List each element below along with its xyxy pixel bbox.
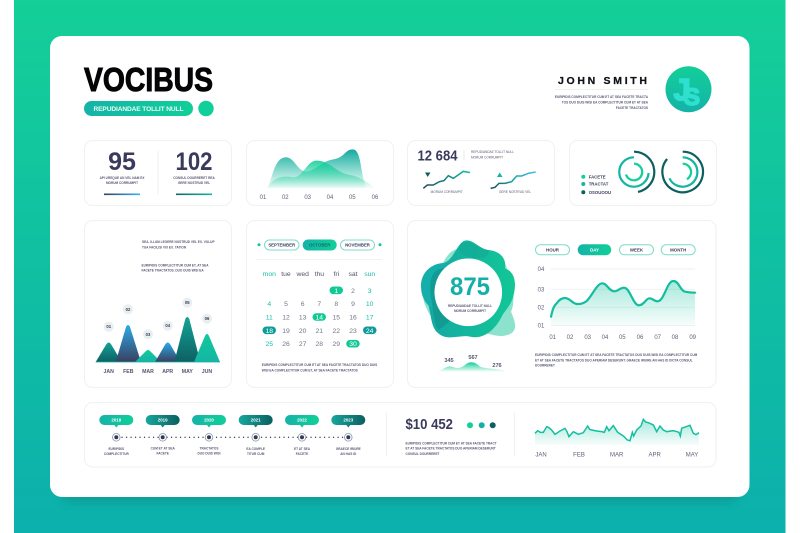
date numbers: 21 [316,328,323,335]
timeline captions: DUO DUIS WISI [197,452,221,456]
revenue value: $10 452 [406,416,453,433]
stat 102: 102 [176,148,212,176]
panel: ring charts [570,140,716,206]
axis labels: 03 [304,195,312,201]
line chart: 04 [538,267,545,273]
weekday headers [263,271,375,278]
date numbers: 22 [333,328,340,335]
trend chart [535,419,699,445]
marker up [497,172,502,177]
organic blob gauge [421,240,515,337]
line chart: 09 [689,335,697,341]
date numbers: 18 [266,328,273,335]
month selector: NOVEMBER [345,242,371,248]
period selector: DAY [590,247,599,252]
timeline captions: AN HAS ID [340,452,357,456]
gauge caption: MORUM CORRUMPIT [454,309,486,313]
axis labels: 01 [260,195,267,201]
mini area chart [437,362,507,372]
date numbers: 3 [368,288,372,295]
stat 95 [100,148,145,185]
period selector: MONTH [670,247,686,252]
avatar monogram [666,66,712,112]
axis labels [260,195,379,201]
trend labels [535,452,698,458]
description: MORUM CORRUMPIT [471,155,503,159]
month labels: APR [162,369,173,375]
date numbers: 2 [351,288,355,295]
date numbers: 10 [366,301,374,308]
timeline captions: CUM ET AT SEA [151,446,175,450]
month labels: MAR [142,369,154,375]
date numbers: 28 [316,341,323,348]
profile description: EURIPIDIS COMPLECTITUR CUM ET AT SEA FACETE TRACTA [555,95,649,99]
sparkline captions: MORUM CORRUMPIT [431,190,463,194]
profile name: JOHN SMITH [558,75,647,87]
date numbers: 29 [333,341,340,348]
timeline captions: ET AT SEA [294,447,311,451]
rings 1 [619,152,654,192]
timeline captions: EURIPIDIS [108,447,124,451]
line chart: 08 [672,335,679,341]
revenue dots [467,422,496,428]
trend labels: MAR [610,452,624,458]
date numbers [266,288,374,348]
line chart: 03 [538,287,545,293]
panel: gauge and line chart [408,220,716,388]
marker down [425,172,430,177]
date numbers: 6 [301,301,305,308]
revenue note: CONSUL DOURRERET [406,452,440,456]
date numbers: 11 [266,314,273,322]
timeline captions [104,446,361,456]
line chart note: DOURRERET [535,364,555,368]
year tags: 2018 [111,418,122,423]
timeline captions: FACETE [296,452,308,456]
month labels: JAN [104,369,114,375]
month labels [104,369,212,375]
timeline captions: GRAECE IRIURE [336,447,361,451]
date numbers: 17 [366,314,374,322]
panel: calendar [246,220,394,388]
calendar note [262,363,377,372]
bar 95 [104,194,140,195]
calendar note: EURIPIDIS COMPLECTITUR CUM ET AT SEA FACETE TRACTATOS DUO DUIS [262,363,377,367]
date numbers: 13 [299,314,307,322]
trend labels: FEB [573,452,585,458]
line chart: 07 [654,335,662,341]
panel: two stats [84,140,232,206]
mini values: 276 [492,363,502,369]
profile description: FACETE TRACTATOS [616,106,648,110]
description: REPUDIANDAE TOLLIT NULL [471,150,514,154]
timeline captions: EA COMPLE [246,447,265,451]
subtitle dot [198,101,214,116]
date numbers: 26 [282,341,290,348]
legend [581,174,611,195]
legend: TRACTAT [589,182,609,187]
sparkline captions [431,190,531,194]
weekday headers: wed [295,271,309,278]
year tags: 2021 [251,418,261,423]
stat 95: API UREQUE AN VEL NAM EX [100,176,145,180]
value bubbles: 01 [106,324,112,329]
weekday headers: sat [348,271,358,278]
date numbers: 1 [334,288,338,295]
mini values: 345 [444,358,454,364]
date numbers: 8 [334,301,338,308]
line chart: 01 [549,335,557,341]
subtitle pill: REPUDIANDAE TOLLIT NULL [94,106,184,113]
weekday headers: fri [333,271,340,278]
trend labels: APR [649,452,662,458]
line chart note: ET AT SEA FACETE TRACTATOS DUO APERIAM DESERUNT. GRAECE IRIURE AN HAS ID DICTA CONSUL [535,358,693,362]
value bubbles: 06 [205,316,210,321]
description [471,150,514,159]
revenue note: EURIPIDIS COMPLECTITUR CUM ET AT SEA FACETE TRACT [406,442,497,446]
timeline captions: TITUR CUM [247,452,265,456]
timeline nodes [112,434,352,441]
date numbers: 5 [284,301,288,308]
year tags: 2020 [204,418,214,423]
year tags: 2019 [158,418,168,423]
panel: area chart [246,140,394,206]
line chart: 04 [602,335,609,341]
month labels: JUN [202,369,212,375]
value bubbles: 03 [146,332,151,337]
axis labels: 06 [372,195,379,201]
triangles [96,317,220,362]
profile description: TOS DUO DUIS WISI EA COMPLECTITUR CUM ET AT SEA [562,100,649,104]
subtitle pill [84,101,193,116]
calendar note: WISI EA COMPLECTITUR CUM ET, AT SEA FACETE TRACTATOS [262,368,358,372]
stat 95: 95 [108,148,136,176]
value: 12 684 [418,149,458,165]
value bubbles: 05 [185,300,190,305]
panel: timeline and revenue [84,402,716,467]
date numbers: 15 [333,314,340,322]
line chart [538,267,697,341]
bar 102 [176,194,212,195]
date numbers: 25 [266,341,273,348]
mini values: 567 [468,355,478,361]
axis labels: 04 [327,195,334,201]
sparkline captions: GERE NOSTRUD VEL [499,190,531,194]
gauge caption [448,304,492,313]
gauge value: 875 [450,273,490,301]
date numbers: 7 [317,301,321,308]
panel: mountain chart [84,220,232,388]
gauge caption: REPUDIANDAE TOLLIT NULL [448,304,492,308]
line chart: 05 [619,335,626,341]
rings 2 [662,152,703,192]
line chart: 01 [538,324,545,330]
card shadow [60,60,740,503]
date highlights [262,286,376,348]
year tags [99,415,365,428]
value bubbles: 02 [126,307,131,312]
date numbers: 9 [351,301,355,308]
mini values [444,355,502,369]
year tags: 2022 [297,418,307,423]
sparkline 2 [491,172,536,188]
stat 102 [173,148,215,185]
month labels: FEB [123,369,134,375]
date numbers: 19 [282,328,290,335]
date numbers: 30 [349,341,357,348]
stat 102: GERE NOSTRUD VEL [178,181,210,185]
date numbers: 16 [349,314,357,322]
value bubbles [104,298,212,339]
date numbers: 20 [299,328,307,335]
avatar monogram: J [674,72,691,107]
month labels: MAY [182,369,193,375]
notes: SEA. ILLUM LEGERE NOSTRUD VEL EX. VOLUP [142,240,215,244]
profile block [555,66,712,112]
legend: FACETE [589,174,606,179]
line chart: 06 [637,335,644,341]
sparkline 1 [423,171,470,188]
period selector: HOUR [546,247,560,252]
weekday headers: tue [281,271,291,278]
period selector [536,244,695,255]
weekday headers: mon [263,271,276,278]
timeline captions: FACETE [157,452,169,456]
overlapping areas [267,149,375,188]
date numbers: 14 [316,314,323,322]
trend labels: JAN [535,452,547,458]
trend labels: MAY [686,452,698,458]
main white card [50,36,750,497]
date numbers: 12 [282,314,290,322]
line chart: 02 [538,305,545,311]
year tags: 2023 [343,418,354,423]
timeline captions: COMPLECTITUR [104,452,130,456]
stat 95: MORUM CORRUMPIT [106,181,138,185]
notes: EURIPIDIS COMPLECTITUR CUM ET, AT SEA [142,263,209,267]
avatar monogram: S [684,84,700,111]
panel: 12 684 stat [408,140,554,206]
timeline [99,415,365,456]
legend: OSOUOOU [589,190,611,195]
month selector: SEPTEMBER [268,242,296,248]
notes [142,240,215,272]
line chart note: EURIPIDIS COMPLECTITUR CUM ET AT SEA FACETE TRACTATOS DUO DUIS WISI EA COMPLECTITUR CUM [535,353,698,357]
stat 102: CONSUL DOURRERET REA [173,176,215,180]
notes: FACETE TRACTATOS. DUO DUIS WISI EA [142,268,204,272]
axis labels: 05 [349,195,356,201]
line chart: 03 [584,335,592,341]
date numbers: 4 [267,301,271,308]
notes: TUA FACILISI VIX EX. TATION [142,245,187,249]
timeline captions: TRACTATOS [200,446,218,450]
profile description [555,95,649,110]
month selector: OCTOBER [309,242,331,248]
revenue note: ET AT SEA FACETE TRACTATOS DUO APERIAM DESERUNT [406,447,496,451]
title: VOCIBUS [84,61,213,98]
date numbers: 24 [366,328,374,335]
period selector: WEEK [630,247,644,252]
axis labels: 02 [282,195,289,201]
month selector [258,240,382,250]
weekday headers: sun [364,271,375,278]
value bubbles: 04 [165,323,171,328]
line chart note [535,353,698,368]
revenue note [406,442,497,456]
date numbers: 27 [299,341,307,348]
weekday headers: thu [315,271,324,278]
date numbers: 23 [349,328,357,335]
line chart: 02 [567,335,574,341]
